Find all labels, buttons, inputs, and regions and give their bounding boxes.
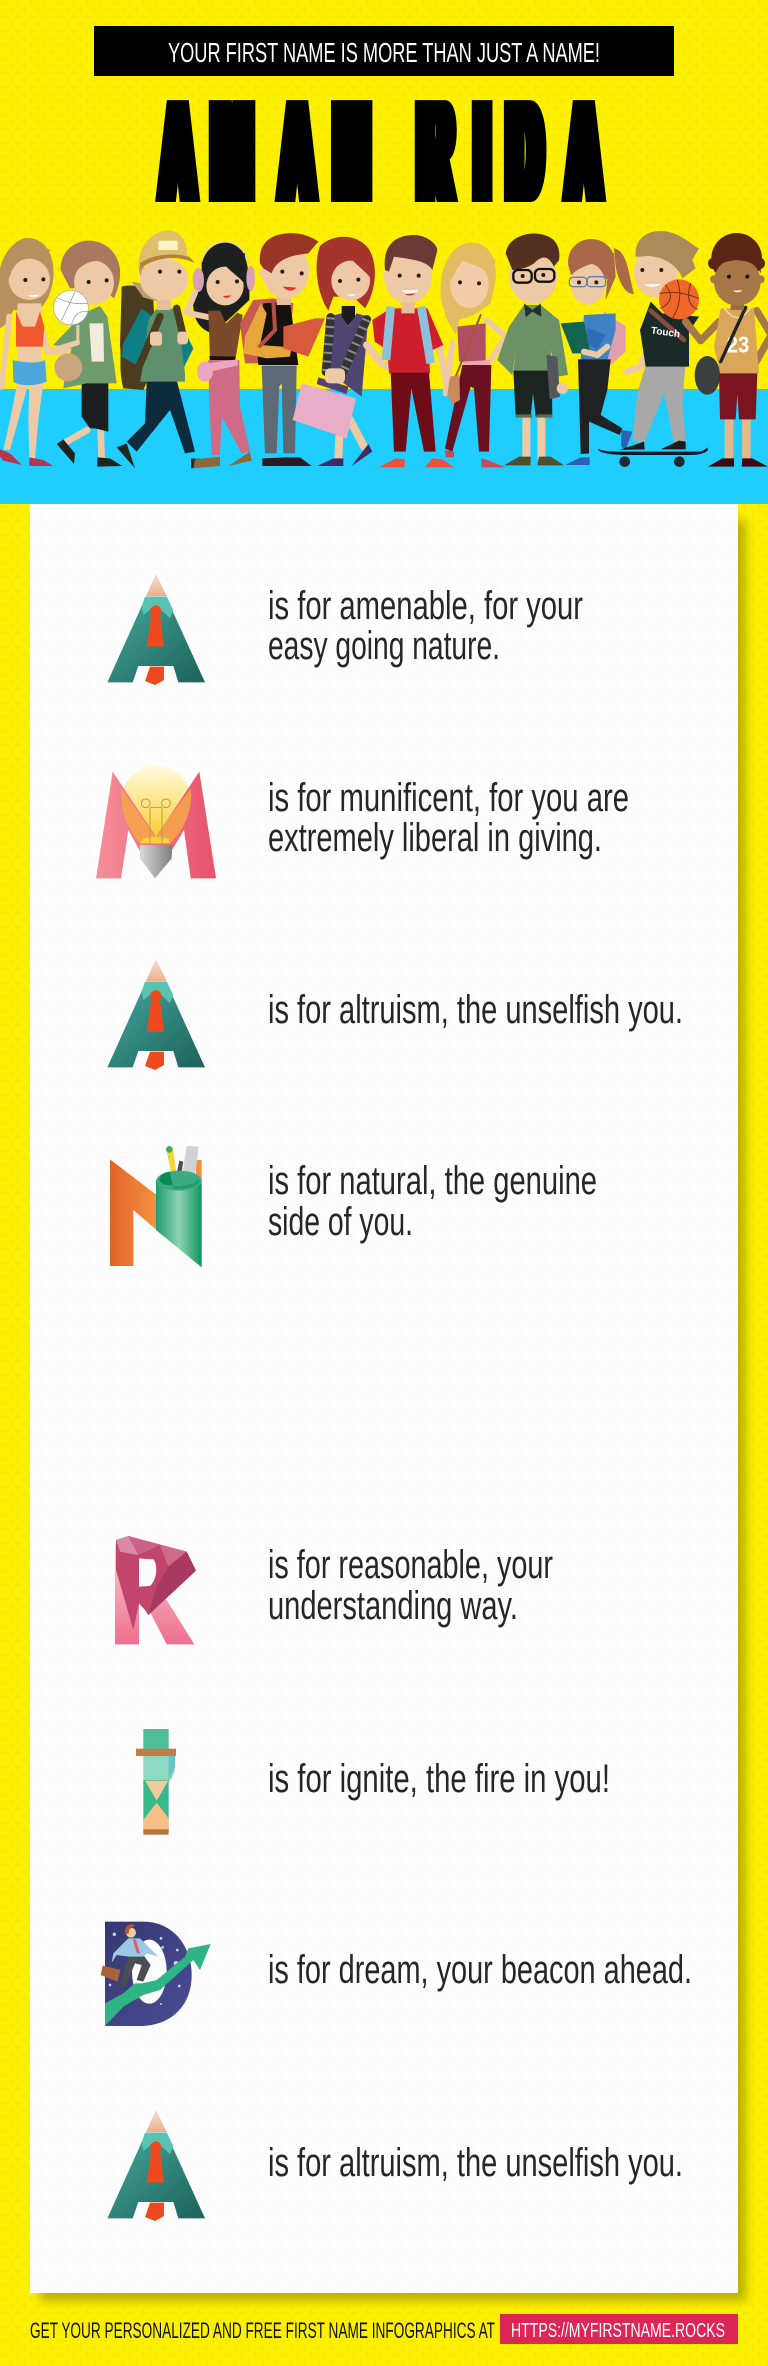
blue floor band (0, 389, 768, 504)
icon: letter A with tie (107, 574, 205, 685)
text: amenable: easy going nature. (268, 624, 500, 668)
row: letter N natural (110, 1146, 597, 1267)
character: girl in green jacket with volleyball (53, 241, 122, 467)
panel shadow (40, 520, 746, 2301)
text: reasonable: is for reasonable, your (268, 1543, 553, 1587)
footer: call to action: GET YOUR PERSONALIZED AND FREE FIRST NAME INFOGRAPHICS AT (30, 2318, 495, 2343)
character: boy with backpack and cap (117, 231, 213, 468)
text: ignite: is for ignite, the fire in you! (268, 1757, 610, 1801)
illustration: group of students, right half (367, 231, 768, 467)
character: boy reading a red book (240, 233, 325, 466)
title: name: AMAN RIDA (161, 70, 601, 234)
row: letter M munificent (96, 766, 629, 878)
icon: letter A with tie (107, 959, 205, 1070)
row: letter I ignite (136, 1729, 610, 1835)
text: munificent: is for munificent, for you are (268, 776, 629, 820)
character: girl with ponytail and notebook (561, 239, 634, 465)
character: girl with red hair and pink bag (293, 237, 375, 466)
character: blonde girl with shoulder bag (441, 243, 506, 467)
character: girl with headphones (187, 242, 255, 468)
character: boy in red t-shirt (367, 235, 454, 467)
row: letter D dream (101, 1922, 692, 2026)
text: amenable: is for amenable, for your (268, 584, 583, 628)
character: skater boy holding basketball: Touch (650, 325, 681, 340)
text: reasonable: understanding way. (268, 1584, 518, 1628)
character: girl in orange top (0, 238, 78, 466)
banner: tagline (94, 26, 674, 76)
icon: letter D with climbing businessman (101, 1922, 211, 2026)
row: letter A altruism (107, 959, 683, 1070)
text: natural: side of you. (268, 1200, 413, 1244)
icon: letter R with gem (115, 1536, 196, 1644)
character: curly-haired boy in yellow jersey: 23 (727, 332, 749, 358)
illustration: group of students, left half (0, 231, 375, 468)
character: skater boy holding basketball (598, 231, 708, 467)
icon: letter A with tie (107, 2110, 205, 2221)
icon: letter I as hourglass (136, 1729, 176, 1835)
character: curly-haired boy in yellow jersey (686, 233, 768, 467)
row: letter R reasonable (115, 1536, 553, 1644)
row: letter A altruism (final) (107, 2110, 683, 2221)
character: boy with glasses in green sweater (497, 234, 568, 465)
text: natural: is for natural, the genuine (268, 1159, 597, 1203)
panel: white letters card (30, 504, 738, 2293)
row: letter A amenable (107, 574, 583, 685)
icon: letter M with light bulb (96, 766, 216, 878)
icon: letter N with pencil cup (110, 1146, 202, 1267)
text: munificent: extremely liberal in giving. (268, 816, 602, 860)
